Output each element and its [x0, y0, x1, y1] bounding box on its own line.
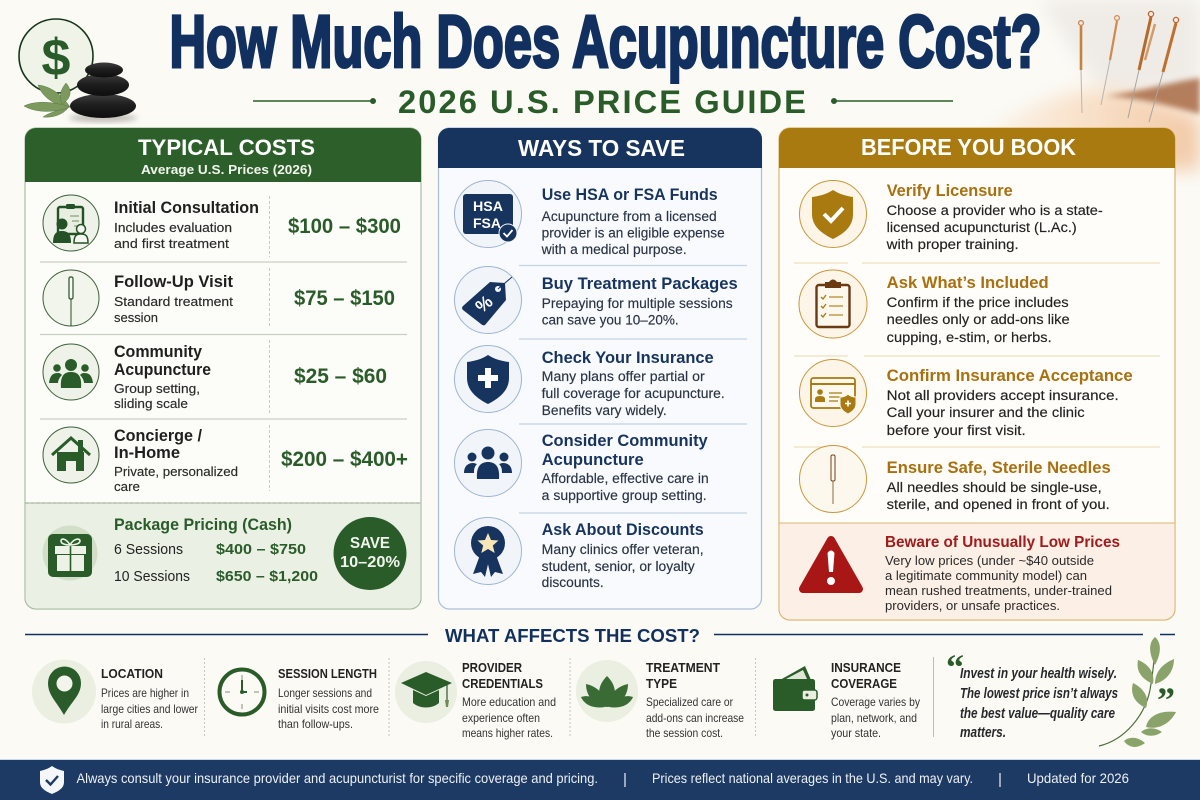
factor: location: in rural areas.	[101, 717, 163, 731]
panel: before you book	[779, 128, 1175, 620]
header: ways to save: WAYS TO SAVE	[518, 135, 685, 161]
item: HSA or FSA funds: FSA	[473, 216, 501, 231]
factor: session length	[220, 666, 379, 731]
item: verify licensure	[800, 180, 1103, 252]
package pricing section: $400 – $750	[216, 541, 306, 558]
factor: provider credentials: experience often	[462, 711, 540, 725]
package pricing section: 10 Sessions	[114, 569, 190, 585]
item: HSA or FSA funds	[454, 180, 725, 257]
item: treatment packages: Buy Treatment Packages	[542, 274, 738, 293]
factor: provider credentials	[395, 660, 556, 740]
item: sterile needles: Ensure Safe, Sterile Needles	[887, 459, 1111, 477]
item: ask about discounts: Many clinics offer veteran,	[542, 542, 704, 557]
row: concierge in-home: care	[114, 479, 140, 494]
header: typical costs	[25, 128, 421, 182]
badge: save 10-20%: SAVE	[350, 535, 390, 552]
item: verify licensure: Choose a provider who is a state-	[887, 203, 1103, 218]
item: ask about discounts: Ask About Discounts	[542, 520, 704, 539]
factor: session length: Longer sessions and	[278, 686, 372, 700]
item: ask what's included	[799, 270, 1070, 345]
factor: session length: initial visits cost more	[278, 702, 379, 716]
factor: treatment type	[576, 660, 744, 740]
row: community acupuncture: Group setting,	[114, 381, 200, 396]
header: before you book	[779, 128, 1175, 168]
package pricing section	[25, 503, 421, 609]
item: ask about discounts: student, senior, or loyalty	[542, 559, 695, 574]
item: ask what's included: needles only or add-ons like	[887, 312, 1070, 327]
icon: gift box	[42, 526, 98, 580]
item: confirm insurance: Call your insurer and the clinic	[887, 405, 1085, 420]
row: follow-up visit: $75 – $150	[294, 287, 395, 310]
factor: location	[32, 660, 198, 731]
panel: ways to save	[438, 128, 762, 609]
row: follow-up visit: session	[114, 310, 158, 325]
item: HSA or FSA funds: HSA	[473, 199, 503, 214]
item: confirm insurance: Confirm Insurance Acceptance	[887, 367, 1133, 385]
header: ways to save	[438, 128, 762, 168]
item: treatment packages: Prepaying for multiple sessions	[542, 296, 733, 311]
subtitle with rules	[253, 84, 953, 120]
header: before you book: BEFORE YOU BOOK	[861, 134, 1076, 160]
factor: location: large cities and lower	[101, 702, 198, 716]
item: community acupuncture	[454, 430, 709, 503]
icon: dollar coin with stacked stones and leaves: $	[42, 29, 71, 87]
row: follow-up visit: Standard treatment	[114, 294, 233, 309]
row: initial consultation: $100 – $300	[288, 215, 401, 238]
row: concierge in-home: $200 – $400+	[281, 448, 408, 471]
item: HSA or FSA funds: with a medical purpose.	[541, 242, 687, 257]
item: check insurance: Benefits vary widely.	[542, 403, 667, 418]
footer bar: Prices reflect national averages in the U.S. and may vary.	[652, 770, 973, 786]
factor: treatment type: the session cost.	[646, 726, 723, 740]
quote with sprig: Invest in your health wisely.	[960, 666, 1117, 682]
item: treatment packages	[454, 266, 738, 334]
item: ask about discounts	[454, 518, 704, 590]
quote with sprig: ”	[1157, 680, 1175, 720]
factor: insurance coverage: Coverage varies by	[831, 695, 920, 709]
row: concierge in-home: Concierge /	[114, 427, 202, 445]
factor: provider credentials: CREDENTIALS	[462, 676, 543, 691]
row: concierge in-home: In-Home	[114, 444, 180, 462]
header: typical costs: TYPICAL COSTS	[138, 135, 315, 160]
item: check insurance: full coverage for acupuncture.	[542, 386, 725, 401]
factor: provider credentials: means higher rates.	[462, 726, 553, 740]
factor: insurance coverage	[773, 660, 920, 740]
item: ask what's included: Ask What’s Included	[887, 274, 1049, 292]
item: check insurance: Many plans offer partial or	[542, 369, 705, 384]
factor: session length: than follow-ups.	[278, 717, 353, 731]
package pricing section: $650 – $1,200	[216, 568, 318, 585]
subtitle with rules: 2026 U.S. PRICE GUIDE	[398, 84, 808, 120]
row: community acupuncture: sliding scale	[114, 396, 188, 411]
heading: what affects the cost: WHAT AFFECTS THE COST?	[445, 626, 700, 646]
item: community acupuncture: Acupuncture	[542, 450, 644, 469]
item: verify licensure: Verify Licensure	[887, 182, 1013, 200]
panel: typical costs	[25, 128, 421, 609]
item: confirm insurance: before your first visit.	[887, 423, 1026, 438]
factor: insurance coverage: your state.	[831, 726, 881, 740]
item: treatment packages: can save you 10–20%.	[542, 312, 679, 328]
warning: unusually low prices: providers, or unsafe practices.	[885, 599, 1060, 613]
row: initial consultation: Initial Consultation	[114, 199, 259, 217]
warning: unusually low prices: a legitimate community model) can	[885, 569, 1087, 583]
package pricing section: Package Pricing (Cash)	[114, 516, 292, 534]
quote with sprig: matters.	[960, 725, 1006, 741]
factor: insurance coverage: COVERAGE	[831, 676, 897, 691]
badge: save 10-20%	[334, 517, 406, 590]
factor: treatment type: TREATMENT	[646, 660, 720, 675]
item: verify licensure: licensed acupuncturist (L.Ac.)	[887, 220, 1077, 235]
item: ask what's included: cupping, e-stim, or herbs.	[887, 330, 1052, 345]
item: check insurance	[454, 346, 725, 418]
warning: unusually low prices: Very low prices (under ~$40 outside	[885, 554, 1094, 568]
factor: treatment type: TYPE	[646, 676, 677, 691]
row: follow-up visit: Follow-Up Visit	[114, 273, 233, 291]
row: community acupuncture	[43, 343, 387, 411]
warning: unusually low prices: mean rushed treatments, under-trained	[885, 584, 1112, 598]
item: verify licensure: with proper training.	[886, 237, 1019, 252]
item: check insurance: Check Your Insurance	[542, 348, 714, 367]
header: typical costs: Average U.S. Prices (2026)	[141, 162, 312, 177]
item: community acupuncture: Affordable, effective care in	[542, 471, 709, 486]
icon: leaf sprig	[1099, 637, 1176, 747]
package pricing section: 6 Sessions	[114, 542, 183, 558]
warning: unusually low prices	[779, 523, 1175, 620]
item: confirm insurance: Not all providers accept insurance.	[887, 388, 1119, 403]
item: HSA or FSA funds: provider is an eligible expense	[542, 226, 725, 240]
footer bar: Always consult your insurance provider and acupuncturist for specific coverage and pricing.	[76, 770, 598, 786]
factor: insurance coverage: INSURANCE	[831, 660, 901, 675]
factor: location: LOCATION	[101, 666, 163, 681]
warning: unusually low prices: Beware of Unusually Low Prices	[885, 534, 1120, 551]
quote with sprig	[934, 637, 1176, 747]
item: community acupuncture: Consider Community	[542, 431, 708, 450]
factor: location: Prices are higher in	[101, 686, 189, 700]
row: follow-up visit	[43, 270, 395, 326]
item: sterile needles: All needles should be single-use,	[887, 480, 1102, 495]
footer bar: Updated for 2026	[1027, 770, 1129, 786]
row: concierge in-home: Private, personalized	[114, 464, 238, 479]
row: initial consultation	[43, 195, 401, 251]
factor: insurance coverage: plan, network, and	[831, 711, 917, 725]
row: concierge in-home	[43, 427, 408, 494]
item: treatment packages: %	[471, 291, 497, 317]
row: initial consultation: Includes evaluation	[114, 220, 232, 235]
factor: treatment type: add-ons can increase	[646, 711, 744, 725]
quote with sprig: the best value—quality care	[960, 706, 1115, 722]
item: sterile needles	[800, 446, 1111, 512]
quote with sprig: “	[946, 647, 964, 687]
item: community acupuncture: a supportive group setting.	[542, 488, 707, 503]
photo: acupuncture needles in skin	[990, 0, 1200, 170]
item: ask what's included: Confirm if the price includes	[887, 295, 1069, 310]
item: HSA or FSA funds: Acupuncture from a licensed	[542, 209, 717, 224]
icon: warning triangle	[803, 540, 859, 589]
factor: provider credentials: More education and	[462, 695, 556, 709]
icon: dollar coin with stacked stones and leaves	[19, 19, 137, 122]
factor: session length: SESSION LENGTH	[278, 666, 377, 681]
row: initial consultation: and first treatment	[114, 236, 229, 251]
factor: treatment type: Specialized care or	[646, 695, 733, 709]
row: community acupuncture: Acupuncture	[114, 361, 211, 379]
footer bar	[0, 759, 1200, 800]
badge: save 10-20%: 10–20%	[340, 554, 400, 571]
item: sterile needles: sterile, and opened in front of you.	[887, 497, 1110, 512]
quote with sprig: The lowest price isn’t always	[960, 686, 1118, 702]
row: community acupuncture: $25 – $60	[294, 365, 387, 388]
icon: shield check	[40, 766, 64, 794]
item: HSA or FSA funds: Use HSA or FSA Funds	[542, 185, 718, 204]
factor: provider credentials: PROVIDER	[462, 660, 523, 675]
item: confirm insurance	[800, 360, 1133, 438]
row: community acupuncture: Community	[114, 343, 203, 361]
item: ask about discounts: discounts.	[542, 575, 604, 590]
